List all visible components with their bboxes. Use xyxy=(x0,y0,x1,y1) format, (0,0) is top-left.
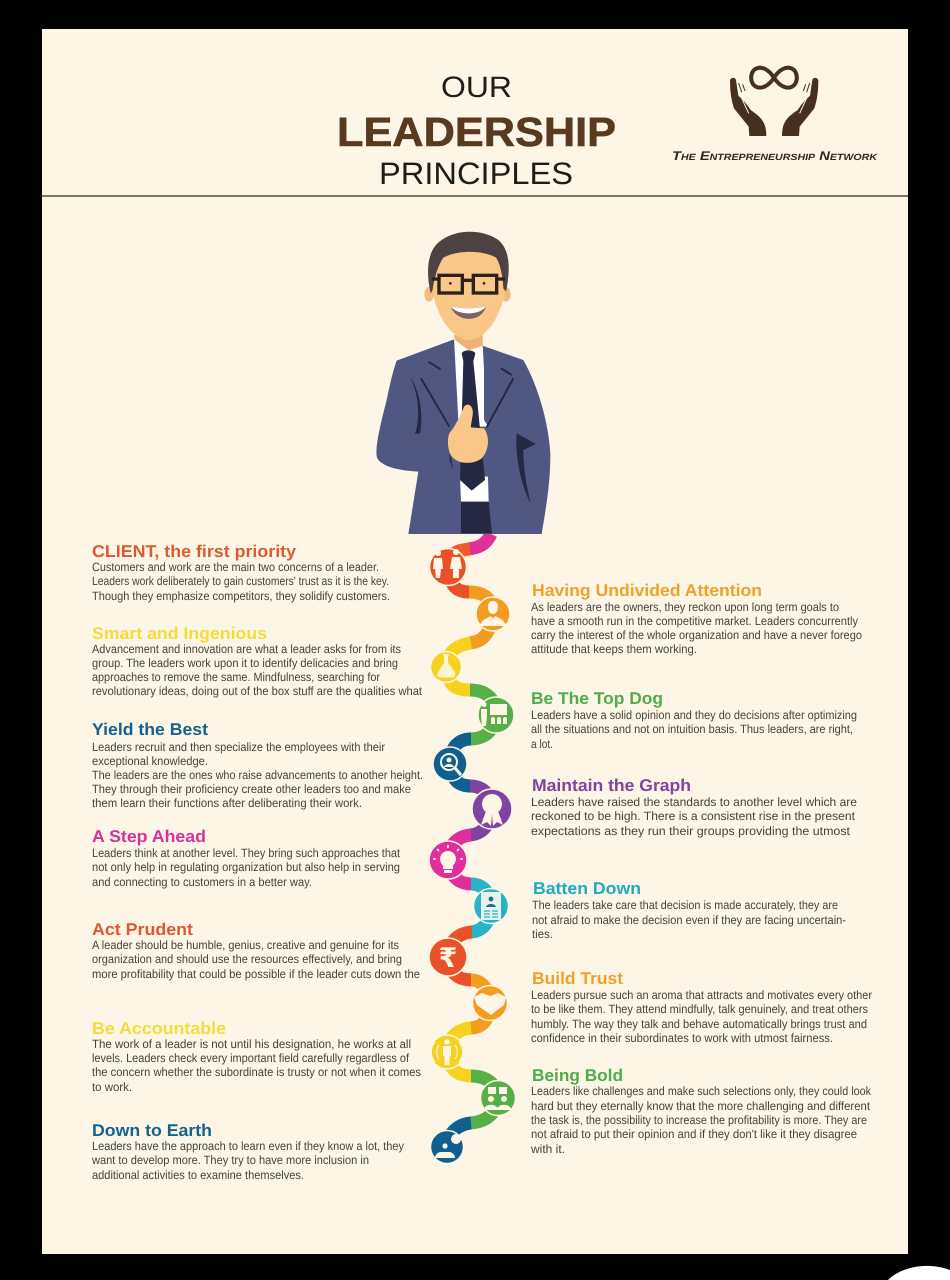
principle: Down to Earth: want to develop more. They try to have more inclusion in xyxy=(91,1153,369,1167)
principle: Act Prudent: organization and should use the resources effectively, and bring xyxy=(92,952,402,966)
principle: Client, the first priority: Customers and work are the main two concerns of a leader. xyxy=(92,560,379,574)
principle: Build Trust: humbly. The way they talk and behave automatically brings trust and xyxy=(531,1017,867,1031)
principle: Be Accountable: to work. xyxy=(92,1080,132,1094)
principle: Being Bold xyxy=(530,1066,872,1156)
principle: Smart and Ingenious: group. The leaders work upon it to identify delicacies and bring xyxy=(92,656,398,670)
principle: Act Prudent: Act Prudent xyxy=(92,920,193,939)
principle: Maintain the Graph xyxy=(531,776,857,838)
principle: Be Accountable: the concern whether the subordinate is trusty or not when it comes xyxy=(92,1065,421,1079)
principle: Batten Down: not afraid to make the decision even if they are facing uncertain- xyxy=(532,913,846,927)
principle: Being Bold: with it. xyxy=(530,1142,565,1156)
illustration: businessman giving thumbs up xyxy=(376,232,550,534)
logo: The Entrepreneurship Network xyxy=(672,68,879,163)
principle: Yield the Best: Yield the Best xyxy=(92,720,208,739)
principle: Having Undivided Attention: As leaders are the owners, they reckon upon long term goals to xyxy=(531,600,839,614)
principle: Build Trust: confidence in their subordinates to work with utmost fairness. xyxy=(531,1031,833,1045)
principle: Be Accountable: The work of a leader is not until his designation, he works at all xyxy=(92,1037,411,1051)
principle: Be The Top Dog: Leaders have a solid opinion and they do decisions after optimizing xyxy=(531,708,857,722)
logo: The Entrepreneurship Network: The Entrepreneurship Network xyxy=(672,149,879,163)
principle: Maintain the Graph: reckoned to be high. There is a consistent rise in the present xyxy=(531,809,856,823)
title xyxy=(337,71,616,191)
principle: Be The Top Dog: a lot. xyxy=(531,737,553,751)
head with glasses xyxy=(424,232,511,340)
principle: Maintain the Graph: Leaders have raised the standards to another level which are xyxy=(531,795,857,809)
title: OUR xyxy=(441,71,512,104)
principle: Yield the Best: Leaders recruit and then specialize the employees with their xyxy=(92,740,385,754)
principle: A Step Ahead: Leaders think at another level. They bring such approaches that xyxy=(92,846,401,860)
principle: A Step Ahead: not only help in regulating organization but also help in serving xyxy=(92,860,400,874)
principle: Having Undivided Attention: Having Undivided Attention xyxy=(532,581,762,600)
step icon 6: award rosette xyxy=(472,789,512,829)
principle: Batten Down: The leaders take care that decision is made accurately, they are xyxy=(532,898,838,912)
principle: Smart and Ingenious: Advancement and innovation are what a leader asks for from its xyxy=(92,642,401,656)
principle: Build Trust xyxy=(531,969,872,1045)
step icon 1: client couple xyxy=(430,548,466,586)
step icon 2: person xyxy=(476,597,510,631)
principle: Act Prudent: A leader should be humble, genius, creative and genuine for its xyxy=(92,938,399,952)
left column xyxy=(91,542,423,1182)
principle: Smart and Ingenious: Smart and Ingenious xyxy=(92,624,267,643)
principle: Build Trust: to be like them. They attend mindfully, talk genuinely, and treat others xyxy=(531,1002,868,1016)
principle: Having Undivided Attention: attitude that keeps them working. xyxy=(531,642,697,656)
principle: Maintain the Graph: Maintain the Graph xyxy=(532,776,691,795)
principle: Batten Down xyxy=(532,879,846,941)
step icon 9: rupee: ₹ xyxy=(439,943,457,974)
principle: Being Bold: Being Bold xyxy=(532,1066,623,1085)
step icon 4: presentation xyxy=(478,697,514,733)
title: LEADERSHIP xyxy=(337,109,616,155)
principle: A Step Ahead xyxy=(92,827,401,889)
principle: Be Accountable: levels. Leaders check every important field carefully regardless of xyxy=(92,1051,410,1065)
step icon 7: light bulb xyxy=(429,841,467,879)
principle: Down to Earth: Leaders have the approach to learn even if they know a lot, they xyxy=(92,1139,404,1153)
principle: Maintain the Graph: expectations as they run their groups providing the utmost xyxy=(531,824,851,838)
step icon 12: team discussion xyxy=(480,1080,516,1116)
principle: Be The Top Dog xyxy=(531,689,857,751)
principle: Smart and Ingenious: revolutionary ideas, doing out of the box stuff are the qualities what xyxy=(92,684,423,698)
principle: A Step Ahead: A Step Ahead xyxy=(92,827,206,846)
principle: Be The Top Dog: Be The Top Dog xyxy=(531,689,663,708)
principle: Batten Down: ties. xyxy=(532,927,553,941)
principle: Smart and Ingenious: approaches to remove the same. Mindfulness, searching for xyxy=(92,670,380,684)
principle: Being Bold: not afraid to put their opinion and if they don't like it they disagree xyxy=(531,1127,857,1141)
principle: Client, the first priority xyxy=(92,542,390,603)
principle: Being Bold: the task is, the possibility to increase the profitability is more. They are xyxy=(531,1113,867,1127)
principle: Be Accountable: Be Accountable xyxy=(92,1019,226,1038)
principle: Down to Earth: additional activities to examine themselves. xyxy=(92,1168,304,1182)
principle: Having Undivided Attention: have a smooth run in the competitive market. Leaders concurrently xyxy=(531,614,858,628)
step icon 5: magnifier xyxy=(433,747,467,781)
principle: Yield the Best: them learn their functions after deliberating their work. xyxy=(92,796,362,810)
principle: Yield the Best: They through their proficiency create other leaders too and make xyxy=(92,782,411,796)
principle: Client, the first priority: Leaders work deliberately to gain customers' trust as it is the key. xyxy=(92,574,389,588)
step icon 8: document profile xyxy=(474,888,508,924)
step icon 3: flask xyxy=(430,652,462,682)
step icon 11: person with signal waves xyxy=(430,1035,464,1069)
principle: Act Prudent: more profitability that could be possible if the leader cuts down the xyxy=(92,967,420,981)
step icon 10: handshake xyxy=(472,986,508,1020)
principle: Having Undivided Attention: carry the interest of the whole organization and have a never forego xyxy=(531,628,862,642)
principle: Build Trust: Leaders pursue such an aroma that attracts and motivates every other xyxy=(531,988,872,1002)
principle: Smart and Ingenious xyxy=(92,624,423,698)
step icon 9: rupee xyxy=(429,938,467,976)
principle: Client, the first priority: Though they emphasize competitors, they solidify customers. xyxy=(92,589,390,603)
principle: Being Bold: Leaders like challenges and make such selections only, they could look xyxy=(531,1084,872,1098)
principle: Down to Earth: Down to Earth xyxy=(92,1121,212,1140)
step icon 13: speaker with thought bubble xyxy=(430,1130,464,1164)
right column xyxy=(530,581,872,1156)
serpentine connector ribbon xyxy=(446,534,498,1147)
principle: Yield the Best: The leaders are the ones who raise advancements to another height. xyxy=(92,768,423,782)
principle: Having Undivided Attention xyxy=(531,581,862,656)
principle: Act Prudent xyxy=(92,920,420,981)
principle: Down to Earth xyxy=(91,1121,404,1182)
principle: Yield the Best: exceptional knowledge. xyxy=(92,754,208,768)
principle: Batten Down: Batten Down xyxy=(533,879,641,898)
principle: Be Accountable xyxy=(92,1019,421,1094)
principle: A Step Ahead: and connecting to customers in a better way. xyxy=(92,875,312,889)
title: PRINCIPLES xyxy=(379,156,573,191)
principle: Being Bold: hard but they eternally know that the more challenging and different xyxy=(531,1099,871,1113)
principle: Client, the first priority: CLIENT, the first priority xyxy=(92,542,297,561)
principle: Build Trust: Build Trust xyxy=(532,969,623,988)
principle: Yield the Best xyxy=(92,720,423,810)
principle: Be The Top Dog: all the situations and not on intuition basis. Thus leaders, are right, xyxy=(531,722,853,736)
